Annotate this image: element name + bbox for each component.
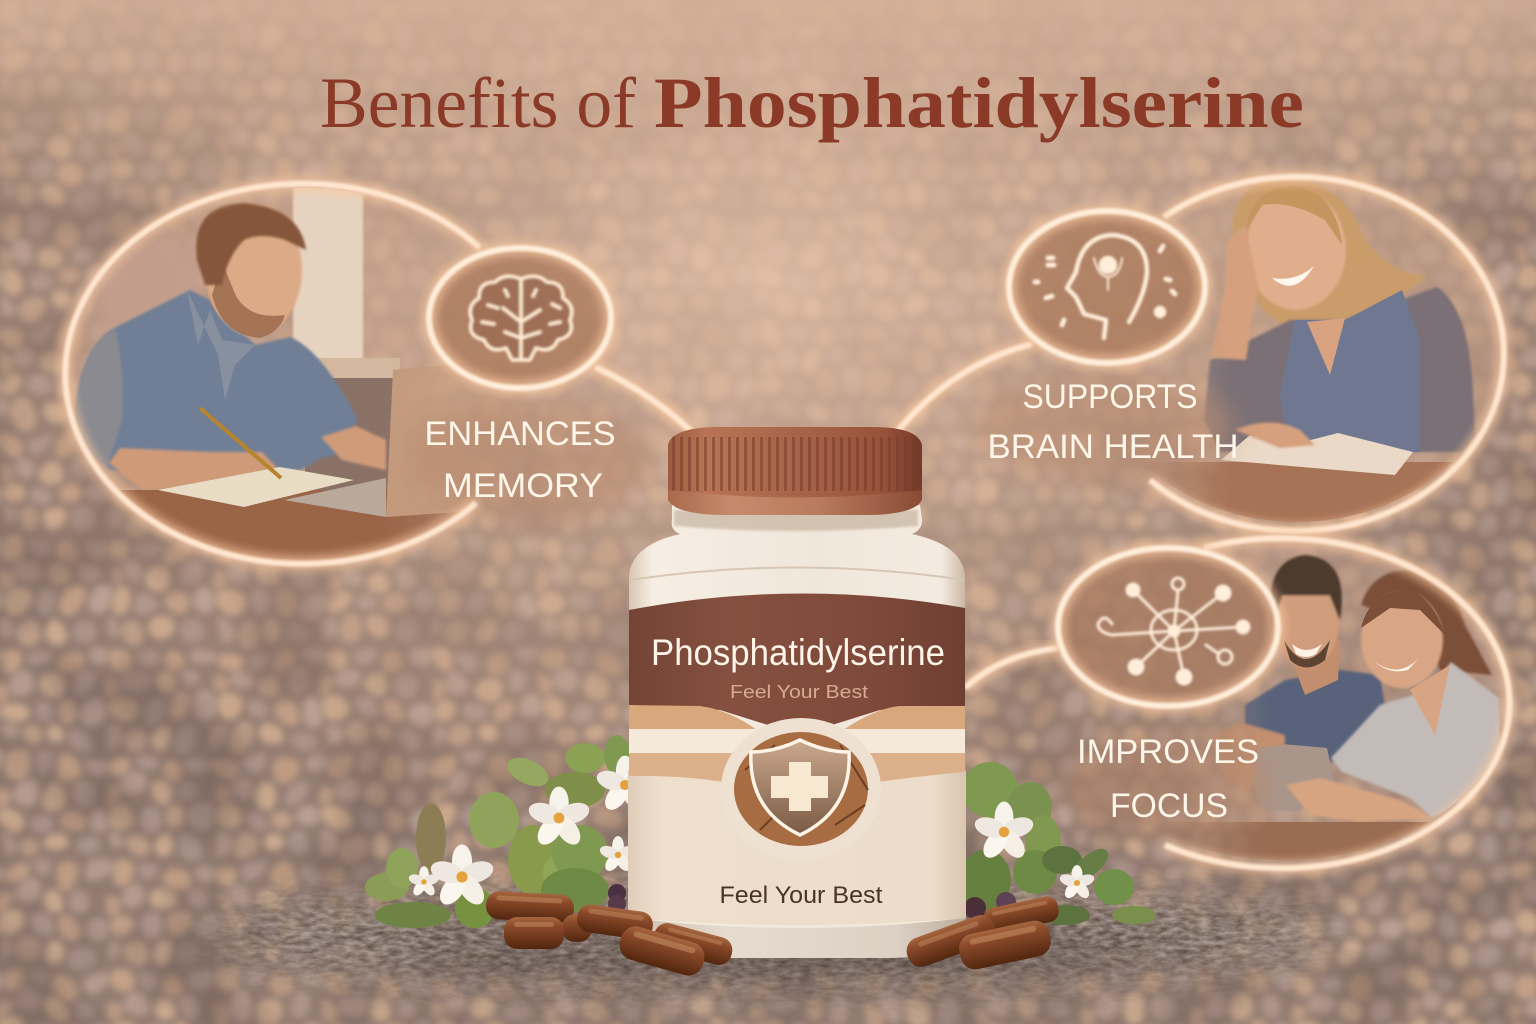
connector [893,344,1032,437]
connector [965,648,1058,688]
panel: enhances memory: MEMORY [443,467,603,505]
bottle [628,427,966,958]
shoulder groove [630,568,964,580]
bottle base [630,918,965,958]
panel: improves focus [965,530,1510,868]
capsules: left group [485,891,735,979]
icon: network [1058,548,1278,706]
bottle brand text: Phosphatidylserine [651,632,945,673]
scene: couple with tablet [1187,548,1504,860]
label: enhances memory: ENHANCES [424,415,616,453]
title: Benefits of Phosphatidylserine [320,63,1304,143]
scene: woman reading [1158,180,1500,522]
panel: supports brain health [893,165,1510,531]
label: improves focus: IMPROVES [1077,733,1259,771]
label: supports brain health: SUPPORTS [1022,378,1198,416]
capsules: right group [903,894,1061,972]
flower [1058,865,1096,901]
label haze [975,373,1235,483]
icon: brain [429,248,611,388]
flower [526,786,592,849]
panel: improves focus: FOCUS [1110,787,1228,825]
bottle cap [668,427,922,515]
panel: enhances memory [60,180,697,570]
flower [594,756,656,814]
lower label [628,770,966,925]
connector [595,367,697,437]
flower [428,844,496,909]
scene: man writing at laptop [70,188,496,561]
bottle footer text: Feel Your Best [720,882,883,909]
badge: shield [721,718,881,860]
panel: supports brain health: BRAIN HEALTH [988,428,1238,466]
bottle tagline: Feel Your Best [730,682,868,702]
outer ring [1150,177,1504,531]
outer ring [1165,538,1510,868]
label haze [410,400,650,524]
label haze [1060,730,1270,840]
flower [598,836,638,874]
label waves [629,705,965,785]
flower [408,866,440,898]
flowers: left cluster [365,735,656,928]
icon: head with eye [1009,211,1205,363]
flowers: right cluster [959,762,1156,925]
neck shadow [674,510,918,531]
flower [972,802,1036,862]
outer ring [65,184,480,564]
bottle body [629,505,965,958]
label band [629,593,965,735]
ground shadow [410,938,1170,978]
